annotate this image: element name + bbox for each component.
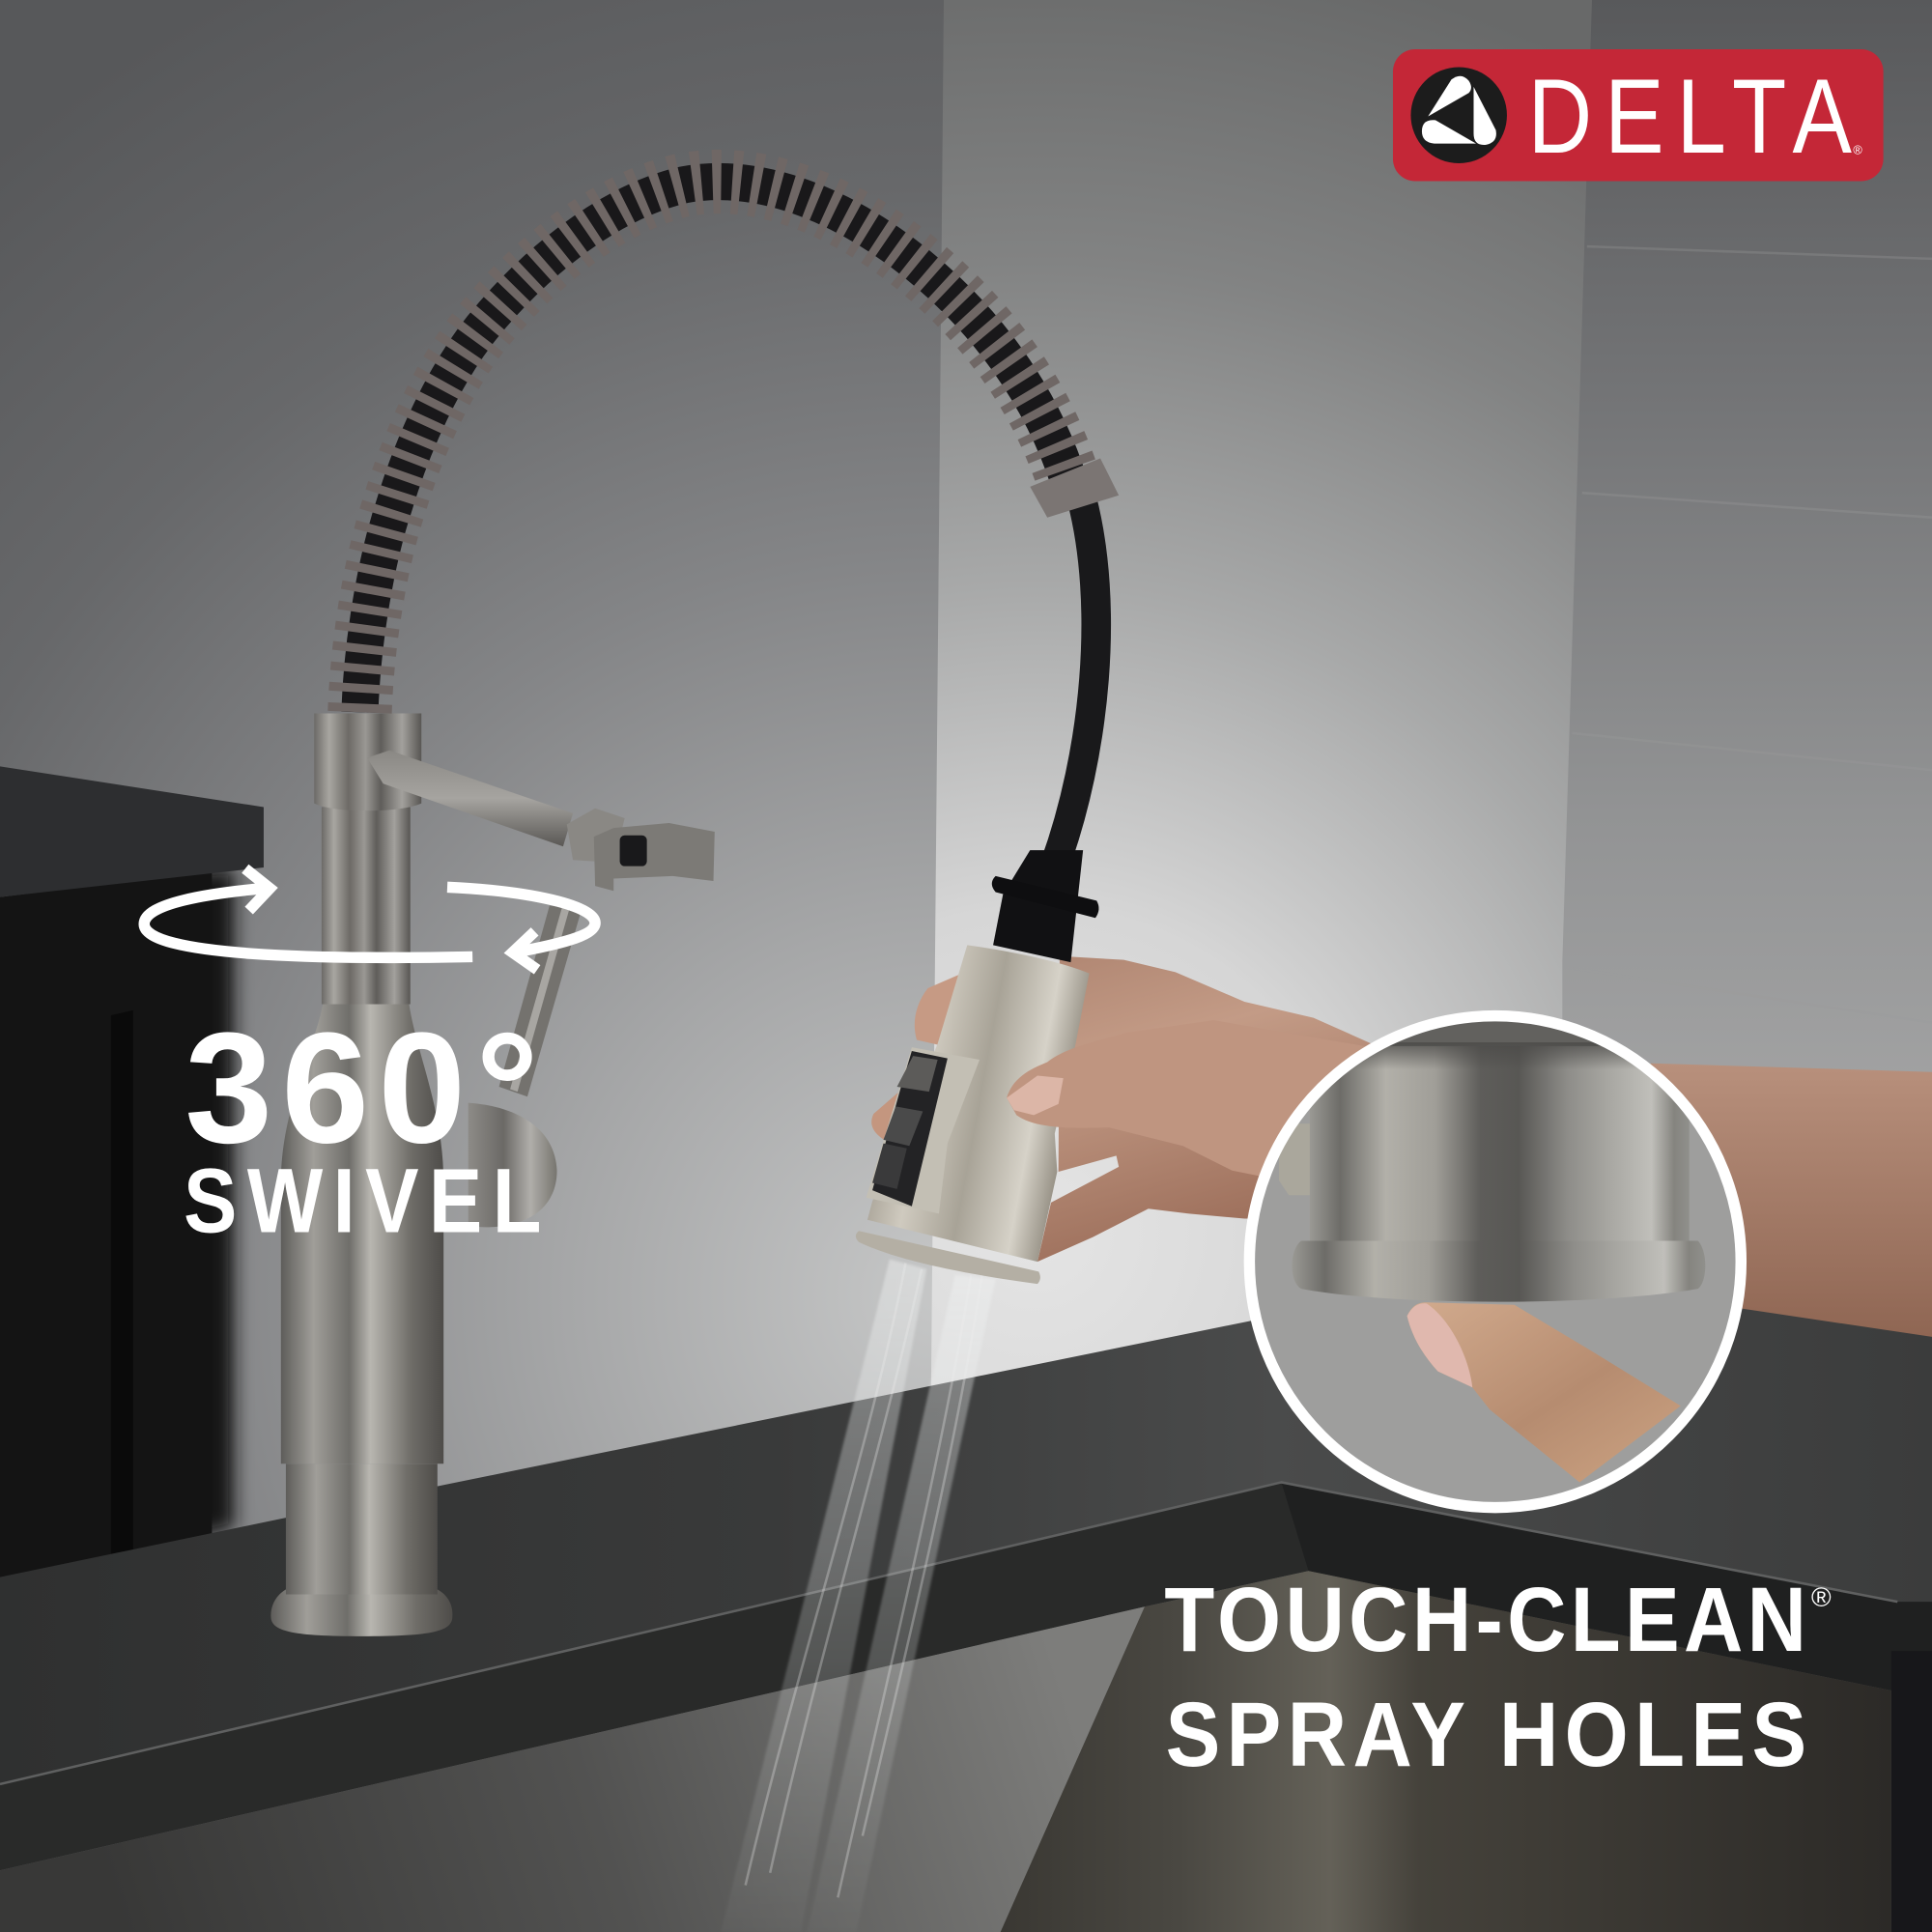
- fingertip: [1407, 1302, 1681, 1482]
- 360 degree label: °: [475, 999, 539, 1176]
- lower button: [872, 1144, 907, 1189]
- main body and neck: [281, 1005, 443, 1463]
- hose: [1054, 499, 1096, 868]
- faucet body: [270, 714, 715, 1636]
- 360 degree label: 360: [185, 999, 466, 1176]
- Delta logo: [1393, 49, 1884, 181]
- middle button: [884, 1106, 923, 1146]
- upper button: [897, 1056, 938, 1092]
- rim: [856, 1231, 1040, 1284]
- spray holes label: SPRAY HOLES: [1166, 1685, 1806, 1786]
- swing arm: [367, 751, 573, 846]
- countertop: [0, 1303, 1932, 1870]
- wordmark: DELTA: [1528, 58, 1852, 176]
- swivel label: SWIVEL: [184, 1151, 541, 1252]
- spring coil: [359, 182, 1119, 712]
- hand behind spray head: [871, 956, 1372, 1262]
- upper tube: [322, 807, 411, 1005]
- arm knuckle: [567, 809, 625, 863]
- registered mark: ®: [1853, 142, 1862, 156]
- inset circle: touch-clean detail: [1249, 1005, 1741, 1508]
- touch-clean label: ®: [1811, 1582, 1832, 1612]
- forearm: [1602, 1064, 1932, 1337]
- pull-down spray head: [856, 850, 1098, 1284]
- stainless steel sink basin: [0, 1571, 1932, 1932]
- swivel arrows: [144, 868, 595, 970]
- back finger lower: [871, 1090, 906, 1142]
- nozzle top: [1389, 1021, 1601, 1046]
- back finger top: [915, 969, 974, 1047]
- spray holder: [594, 823, 715, 891]
- water spray: [721, 1260, 996, 1932]
- foot: [270, 1589, 452, 1636]
- fingernail: [1407, 1303, 1472, 1387]
- lower cylinder: [286, 1463, 438, 1595]
- palm: [1037, 956, 1372, 1262]
- handle: [469, 1103, 557, 1227]
- black flange: [992, 876, 1098, 918]
- coil end cap: [1030, 458, 1119, 518]
- nozzle cylinder: [1310, 1042, 1690, 1246]
- button panel: [872, 1051, 948, 1207]
- icon: delta tri-drop: [1410, 68, 1507, 163]
- fingernail: [1007, 1076, 1064, 1115]
- index finger over the spray head: [1007, 1020, 1372, 1182]
- touch-clean label: TOUCH-CLEAN: [1164, 1570, 1806, 1671]
- wand body: [867, 945, 1090, 1262]
- side bump on nozzle: [1279, 1123, 1312, 1195]
- pot-filler link tube: [499, 906, 582, 1096]
- black neck: [993, 850, 1083, 962]
- button housing: [867, 1047, 980, 1213]
- nozzle rim: [1292, 1240, 1705, 1302]
- left cabinet with dark top: [0, 766, 264, 1583]
- collar: [314, 714, 421, 810]
